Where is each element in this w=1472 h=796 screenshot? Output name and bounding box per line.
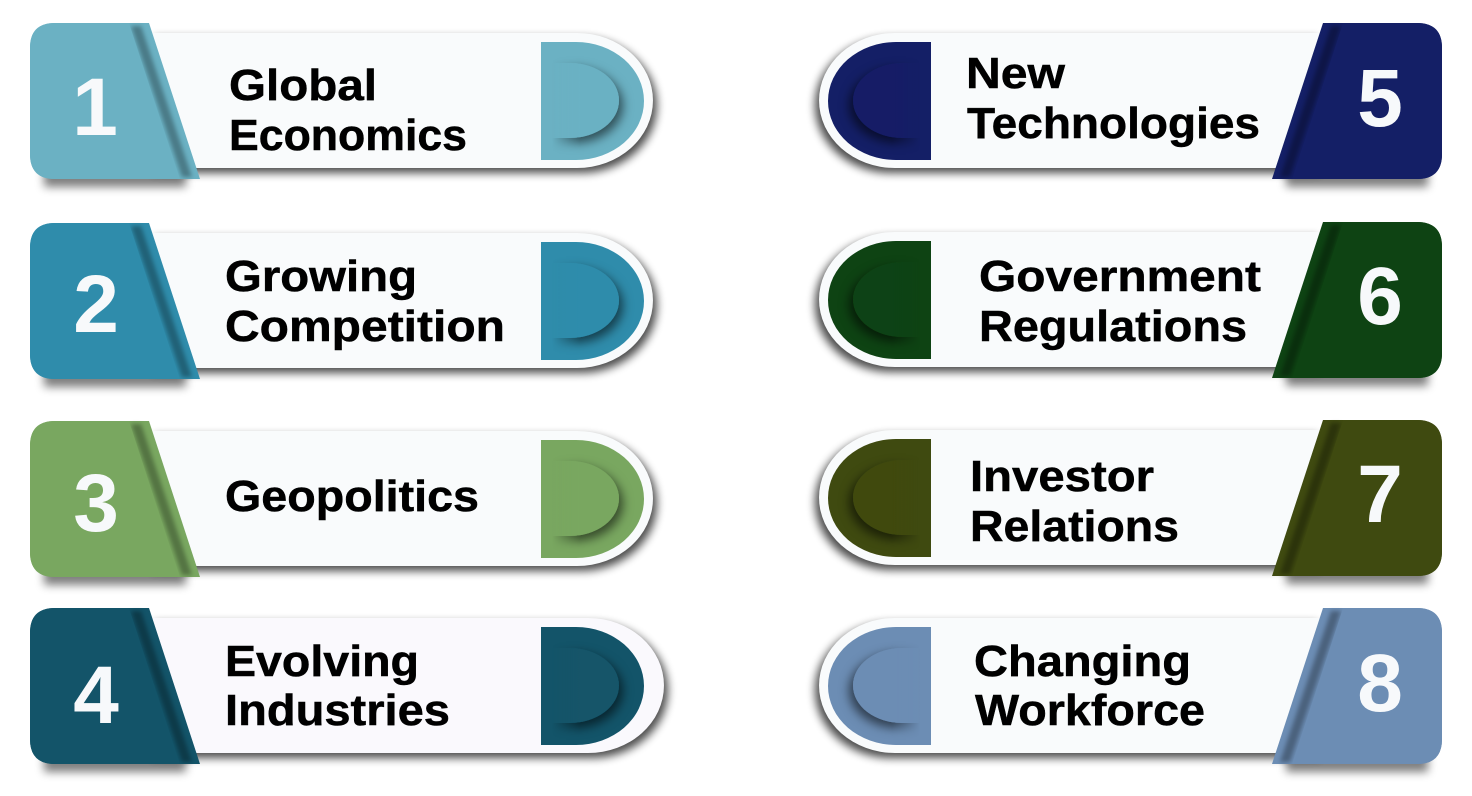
label: New Technologies (966, 49, 1260, 148)
card 2 shapes (30, 223, 657, 387)
card 7: Investor Relations (815, 420, 1442, 584)
label: Growing Competition (225, 252, 505, 351)
card 1: Global Economics (30, 23, 657, 187)
card 5 shapes (815, 23, 1442, 187)
card 3: Geopolitics (30, 421, 657, 585)
card 3 shapes (30, 421, 657, 585)
number 6: 6 (1357, 251, 1403, 342)
label: Evolving Industries (225, 637, 450, 735)
card 6 shapes (815, 222, 1442, 386)
label: Evolving Industries: Industries (225, 686, 450, 735)
label: Global Economics: Global (229, 61, 377, 110)
label: Investor Relations: Relations (970, 502, 1179, 551)
label: Changing Workforce: Workforce (975, 686, 1205, 735)
label: New Technologies: Technologies (967, 99, 1260, 148)
card 1 shapes (30, 23, 657, 187)
number 7: 7 (1357, 449, 1403, 540)
label: Government Regulations (979, 252, 1261, 351)
number 4: 4 (73, 650, 119, 741)
label: Government Regulations: Government (979, 252, 1261, 301)
label: New Technologies: New (966, 49, 1066, 98)
label: Global Economics: Economics (229, 111, 467, 160)
label: Global Economics (229, 61, 467, 160)
label: Growing Competition: Growing (225, 252, 417, 301)
label: Investor Relations: Investor (970, 452, 1154, 501)
label: Investor Relations (970, 452, 1179, 551)
card 7 shapes (815, 420, 1442, 584)
number 2: 2 (73, 259, 119, 350)
label: Evolving Industries: Evolving (225, 637, 419, 686)
card 4: Evolving Industries (30, 608, 668, 772)
number 5: 5 (1357, 53, 1403, 144)
label: Geopolitics: Geopolitics (225, 472, 479, 521)
number 1: 1 (72, 62, 118, 153)
card 4 shapes (30, 608, 668, 772)
number 8: 8 (1357, 638, 1403, 729)
label: Government Regulations: Regulations (979, 302, 1247, 351)
card 2: Growing Competition (30, 223, 657, 387)
card 8 shapes (815, 608, 1442, 772)
card 5: New Technologies (815, 23, 1442, 187)
label: Changing Workforce: Changing (974, 637, 1191, 686)
label: Changing Workforce (974, 637, 1205, 735)
number 3: 3 (73, 458, 119, 549)
card 6: Government Regulations (815, 222, 1442, 386)
card 8: Changing Workforce (815, 608, 1442, 772)
label: Growing Competition: Competition (225, 302, 505, 351)
